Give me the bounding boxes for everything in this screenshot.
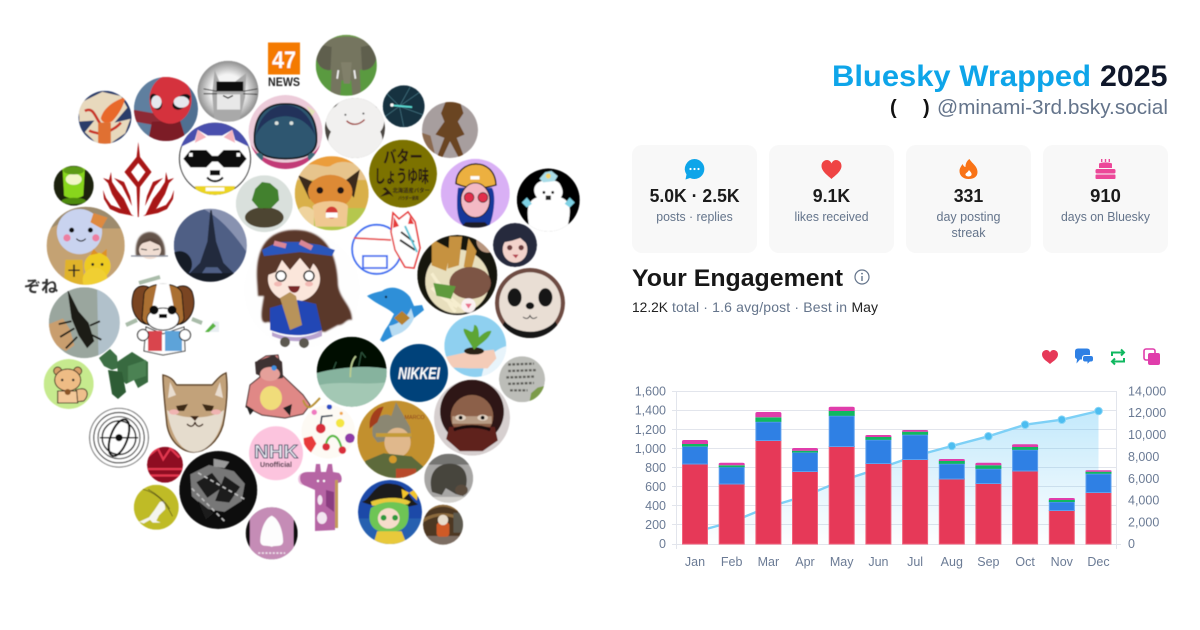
handle: (: [890, 97, 897, 119]
month labels: Feb: [721, 555, 743, 569]
icon: quotes: [1144, 349, 1160, 365]
text: engagement summary: total · 1.6 avg/post · Best in: [672, 299, 847, 315]
card: days on Bluesky: 910: [1090, 186, 1121, 206]
avatar: pixel cow: [246, 355, 320, 418]
avatar: 47 NEWS logo: NEWS: [268, 75, 300, 89]
title: 2025: [1100, 60, 1168, 93]
icon: replies: [1075, 348, 1094, 365]
avatar: NHK unofficial: Unofficial: [260, 462, 292, 469]
avatar: sunglasses cat: [198, 61, 258, 122]
stacked bars: replies: [682, 416, 1111, 510]
avatar: butter soy sauce: 北海道産バター: [392, 187, 430, 195]
avatar: maneki cat figure: [47, 207, 125, 292]
avatar: white creature on black: [517, 168, 580, 232]
avatar: cherries: [301, 404, 355, 459]
avatar: dark seafloor: [317, 337, 387, 407]
avatar: red crest emblem: [103, 142, 174, 217]
avatar: maneki cat figure: 十: [68, 263, 80, 278]
panel: stat cards: [632, 145, 1168, 253]
avatar: beetle in hand: [49, 287, 120, 358]
left axis labels: 600: [645, 480, 666, 494]
avatar: bishop portrait: MARCO: [405, 415, 425, 421]
icon: chat bubble: [685, 159, 704, 180]
icon: cake: [1096, 159, 1116, 179]
stacked bars: reposts: [682, 411, 1112, 502]
right axis labels: 10,000: [1128, 428, 1166, 442]
card: day posting streak: streak: [952, 226, 986, 240]
card: likes received: 9.1K: [813, 186, 850, 206]
card: posts and replies: 5.0K · 2.5K: [650, 186, 740, 206]
left axis labels: 1,000: [635, 442, 666, 456]
month labels: Apr: [795, 555, 815, 569]
avatar: gray pixel art: [179, 451, 257, 529]
month labels: [685, 555, 1110, 569]
avatar: koishi character: [358, 480, 422, 544]
avatar: dolphin: [367, 288, 424, 342]
left axis labels: 800: [645, 461, 666, 475]
avatar: butter soy sauce: パウダー使用: [398, 195, 419, 201]
month labels: Dec: [1087, 555, 1110, 569]
avatar: red neon pattern: [147, 447, 183, 483]
cumulative line: [695, 411, 1098, 532]
left axis labels: 0: [659, 537, 666, 551]
avatar: pixel sunglasses panda: [179, 123, 251, 195]
right axis labels: 12,000: [1128, 406, 1166, 420]
avatar: cotton snowman: [325, 96, 385, 163]
card: likes received: likes received: [794, 210, 869, 224]
right axis labels: 8,000: [1128, 450, 1159, 464]
avatar: green candle: [54, 166, 94, 206]
avatar: plant in hands: [444, 315, 506, 377]
icon: flame: [960, 159, 978, 179]
left axis labels: 1,600: [635, 384, 666, 398]
avatar: squirrel: [44, 359, 94, 409]
right axis labels: 4,000: [1128, 494, 1159, 508]
avatar: 47 NEWS logo: [268, 42, 300, 89]
avatar: giraffe: [298, 464, 342, 531]
card: days on Bluesky: days on Bluesky: [1061, 210, 1151, 224]
avatar: elephant: [316, 35, 377, 96]
avatar: reading dog: [126, 277, 202, 355]
stacked bars: quotes: [682, 407, 1112, 500]
avatar: eiffel tower: [167, 209, 247, 283]
avatar: NIKKEI logo: NIKKEI: [398, 365, 440, 383]
avatar: pink ghost: [246, 507, 298, 559]
avatar: dark spider web: [383, 85, 425, 127]
left axis labels: 400: [645, 499, 666, 513]
right axis labels: [1128, 384, 1166, 551]
month labels: May: [830, 555, 854, 569]
heading: your engagement: Your Engagement: [632, 265, 843, 292]
left axis labels: 200: [645, 518, 666, 532]
avatar: butter soy sauce: [369, 140, 437, 208]
avatar: brown silhouette: [422, 102, 478, 158]
avatar: small orange figure: [423, 505, 463, 545]
month labels: Jun: [868, 555, 889, 569]
right axis labels: 2,000: [1128, 516, 1159, 530]
right axis labels: 14,000: [1128, 384, 1166, 398]
panel: header: [832, 60, 1168, 119]
card: day posting streak: [906, 145, 1031, 253]
avatar: fox mask: [391, 212, 420, 268]
avatar: NIKKEI logo: [390, 344, 448, 402]
avatar: butter soy sauce: バター: [383, 148, 423, 167]
card: day posting streak: day posting: [936, 210, 1001, 224]
icon: heart: [822, 160, 842, 179]
chart: monthly engagement: [635, 384, 1166, 569]
month labels: Nov: [1051, 555, 1074, 569]
month labels: Mar: [758, 555, 779, 569]
avatar: shiba dog: [163, 373, 227, 452]
card: days on Bluesky: [1043, 145, 1168, 253]
chart legend: [1042, 348, 1160, 365]
month labels: Jan: [685, 555, 705, 569]
text: engagement summary: 12.2K: [632, 299, 669, 315]
card: day posting streak: 331: [954, 186, 983, 206]
avatar: torch: [78, 91, 132, 144]
avatar: NHK unofficial: NHK: [254, 442, 298, 462]
text: zone hiragana: ぞね: [24, 278, 58, 296]
avatar: deadpool figure: [131, 75, 198, 141]
right axis labels: 6,000: [1128, 472, 1159, 486]
icon: pencil fragment: [205, 321, 219, 332]
month labels: Sep: [977, 555, 1000, 569]
cumulative area: [695, 411, 1098, 544]
avatar: main girl character: [244, 230, 360, 348]
icon: info: [855, 270, 869, 284]
avatar: anime girl: [493, 223, 537, 267]
icon: reposts: [1112, 350, 1124, 364]
avatar: armillary compass: [90, 408, 148, 467]
avatar: eevee: [295, 156, 369, 230]
avatar: 47 NEWS logo: 47: [272, 47, 296, 74]
card: posts and replies: posts · replies: [656, 210, 733, 224]
handle: @minami-3rd.bsky.social: [937, 97, 1168, 119]
panel: avatar cluster: [24, 35, 580, 559]
month labels: Aug: [941, 555, 963, 569]
avatar: bishop portrait: [357, 401, 435, 478]
avatar: slime character: [248, 95, 322, 169]
avatar: bonsai: [236, 175, 293, 232]
avatar: sleepy girl: [131, 232, 168, 259]
icon: likes: [1042, 350, 1058, 364]
avatar: yellow hat portrait: [441, 159, 510, 228]
avatar: blue face doodle: [352, 225, 401, 274]
left axis labels: 1,200: [635, 423, 666, 437]
avatar: intense face: [434, 380, 510, 456]
stacked bars: likes: [682, 440, 1111, 544]
text: engagement summary: May: [852, 299, 878, 315]
right axis labels: 0: [1128, 537, 1135, 551]
avatar: udon bowl: [417, 230, 499, 315]
avatar: minecraft horse: [99, 349, 148, 399]
line points: [948, 407, 1102, 450]
avatar: running rabbit: [134, 485, 179, 530]
title: Bluesky Wrapped: [832, 60, 1091, 93]
avatar: bear: [424, 454, 473, 503]
card: likes received: [769, 145, 894, 253]
left axis labels: 1,400: [635, 404, 666, 418]
month labels: Oct: [1015, 555, 1035, 569]
left axis labels: [635, 384, 666, 551]
avatar: stone text: [499, 356, 545, 402]
card: posts and replies: [632, 145, 757, 253]
avatar: NHK unofficial: [249, 426, 303, 480]
avatar: butter soy sauce: しょうゆ味: [374, 167, 429, 187]
avatar: panda plush: [495, 268, 565, 338]
handle: ): [923, 97, 930, 119]
month labels: Jul: [907, 555, 923, 569]
